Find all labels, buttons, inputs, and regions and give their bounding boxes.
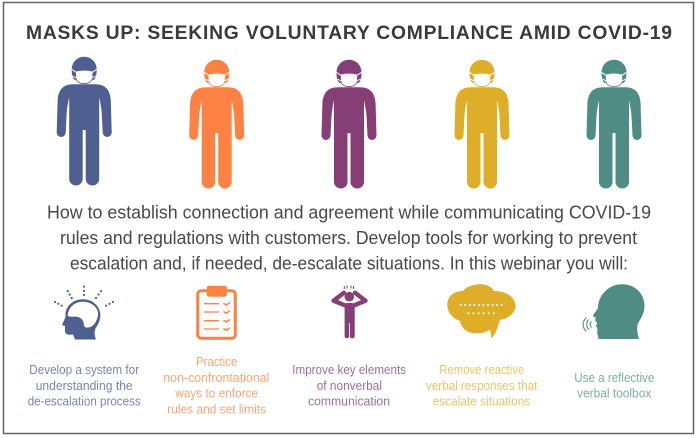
caption: enforcing rules: non-confrontational	[163, 371, 269, 385]
intro paragraph: How to establish connection and agreement while communicating COVID-19	[47, 201, 651, 222]
intro paragraph: rules and regulations with customers. Develop tools for working to prevent	[60, 227, 637, 248]
intro paragraph	[47, 201, 651, 274]
figure row: masked people	[57, 57, 641, 188]
caption: nonverbal communication: Improve key elements	[292, 363, 406, 377]
caption: enforcing rules: rules and set limits	[167, 402, 266, 416]
intro paragraph: escalation and, if needed, de-escalate situations. In this webinar you will:	[70, 252, 628, 274]
icon: speech bubble	[447, 284, 516, 338]
caption: de-escalation system: Develop a system for	[29, 363, 139, 377]
caption: reactive verbal responses: escalate situations	[433, 395, 530, 409]
caption: verbal toolbox: verbal toolbox	[577, 387, 652, 401]
caption: nonverbal communication: of nonverbal	[317, 379, 382, 393]
caption: reactive verbal responses	[426, 363, 538, 409]
figure: teal person	[586, 60, 642, 188]
caption: enforcing rules: Practice	[196, 355, 237, 369]
figure: yellow person	[454, 60, 510, 188]
caption: de-escalation system	[28, 363, 141, 409]
icon: stressed person with hands on head	[334, 286, 366, 338]
icon: head with brain	[54, 286, 114, 340]
caption: nonverbal communication	[292, 363, 406, 409]
caption: nonverbal communication: communication	[308, 395, 390, 409]
caption: enforcing rules	[163, 355, 269, 416]
caption: reactive verbal responses: Remove reactive	[439, 363, 524, 377]
caption: reactive verbal responses: verbal responses that	[426, 379, 538, 393]
figure: blue person	[57, 57, 112, 185]
caption: verbal toolbox	[574, 371, 654, 401]
caption: de-escalation system: de-escalation process	[28, 395, 141, 409]
figure: orange person	[189, 60, 244, 188]
icon: speaking head	[583, 284, 644, 339]
icon: clipboard checklist	[198, 286, 235, 338]
figure: purple person	[322, 60, 376, 188]
caption: de-escalation system: understanding the	[36, 379, 133, 393]
caption: enforcing rules: ways to enforce	[174, 387, 258, 401]
caption: verbal toolbox: Use a reflective	[574, 371, 654, 385]
title: MASKS UP: SEEKING VOLUNTARY COMPLIANCE AMID COVID-19	[26, 23, 672, 44]
